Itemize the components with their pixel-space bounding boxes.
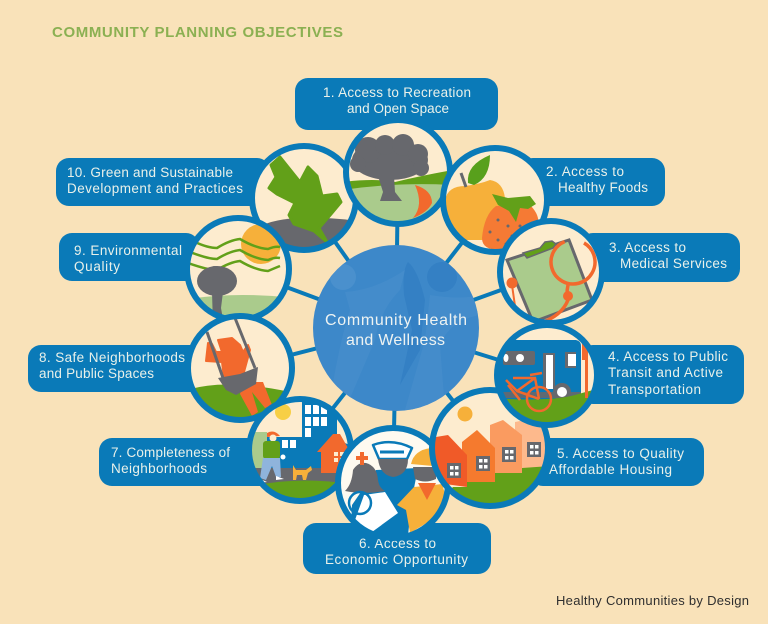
source caption: Healthy Communities by Design — [556, 593, 749, 608]
label 4: public transit and active transportation: Transportation — [608, 382, 701, 397]
label 3: medical services: 3. Access to — [609, 240, 686, 255]
spokes linking the hub to the circles — [238, 172, 551, 483]
label 1: recreation and open space: and Open Space — [347, 101, 449, 116]
icon: tree and park, recreation — [343, 119, 453, 228]
icon: waves, sun and tree, environmental quality — [187, 218, 295, 325]
label 1: recreation and open space: 1. Access to Recreation — [323, 85, 471, 100]
label 2: healthy foods: Healthy Foods — [558, 180, 648, 195]
label 4: public transit and active transportation: Transit and Active — [608, 365, 723, 380]
label 2: healthy foods: 2. Access to — [546, 164, 624, 179]
icon: nurse, police officer and worker, economic opportunity — [338, 428, 448, 545]
label 7: completeness of neighborhoods: Neighborhoods — [111, 461, 207, 476]
central hub: community health and wellness — [313, 245, 480, 411]
central hub: community health and wellness: and Wellness — [346, 332, 445, 349]
label 3: medical services — [580, 233, 740, 282]
icon: clipboard and stethoscope, medical services — [500, 221, 603, 323]
label 6: economic opportunity: 6. Access to — [359, 536, 436, 551]
label 10: green and sustainable development: Development and Practices — [67, 181, 243, 196]
icon: bus and bicycle, transit — [490, 325, 600, 430]
label 9: environmental quality: Quality — [74, 259, 120, 274]
icon: apple and strawberry, healthy foods — [443, 148, 547, 252]
label 9: environmental quality — [59, 233, 199, 281]
label 5: quality affordable housing — [530, 438, 704, 486]
label 8: safe neighborhoods and public spaces: and Public Spaces — [39, 366, 154, 381]
central hub: community health and wellness: Community Health — [325, 312, 467, 329]
label 4: public transit and active transportation — [580, 345, 744, 404]
label 10: green and sustainable development: 10. Green and Sustainable — [67, 165, 233, 180]
label 8: safe neighborhoods and public spaces — [28, 345, 208, 392]
label 8: safe neighborhoods and public spaces: 8. Safe Neighborhoods — [39, 350, 185, 365]
icon: row of houses, affordable housing — [430, 390, 550, 510]
icon: oak leaf, green and sustainable — [250, 146, 360, 260]
label 1: recreation and open space — [295, 78, 498, 130]
label 5: quality affordable housing: 5. Access to Quality — [557, 446, 684, 461]
title: COMMUNITY PLANNING OBJECTIVES — [52, 24, 343, 41]
label 7: completeness of neighborhoods — [99, 438, 279, 486]
icon: swing with child, safe public spaces — [185, 315, 295, 425]
label 4: public transit and active transportation: 4. Access to Public — [608, 349, 728, 364]
label 6: economic opportunity: Economic Opportunity — [325, 552, 468, 567]
label 3: medical services: Medical Services — [620, 256, 727, 271]
label 5: quality affordable housing: Affordable Housing — [549, 462, 672, 477]
label 2: healthy foods — [520, 158, 665, 206]
label 7: completeness of neighborhoods: 7. Completeness of — [111, 445, 230, 460]
label 9: environmental quality: 9. Environmental — [74, 243, 182, 258]
icon: neighborhood with walker, dog and house — [248, 399, 352, 510]
label 10: green and sustainable development — [56, 158, 270, 206]
label 6: economic opportunity — [303, 523, 491, 574]
